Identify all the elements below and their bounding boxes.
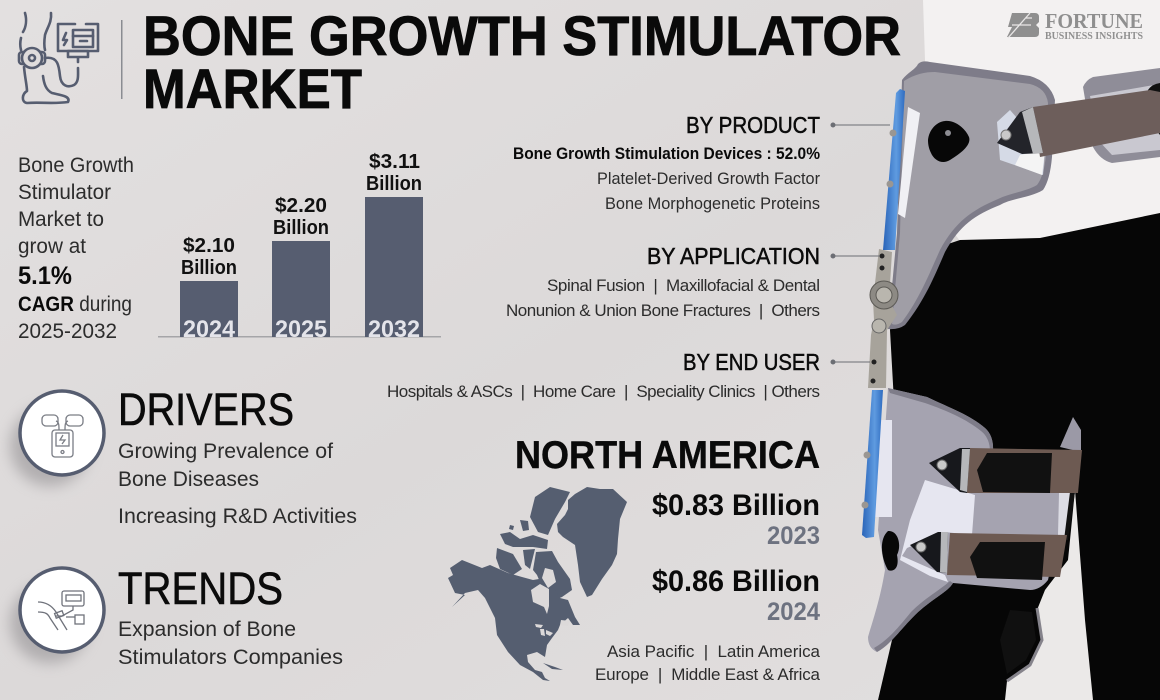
other regions: Asia Pacific | Latin America <box>607 642 821 661</box>
regional values: 2024 <box>767 598 820 626</box>
lower black spot <box>882 531 899 571</box>
white shirt <box>923 0 1160 241</box>
by product block: Platelet-Derived Growth Factor <box>597 169 820 188</box>
drivers text block: Increasing R&D Activities <box>118 504 357 528</box>
light gap between legs <box>1000 450 1100 700</box>
lower brace pad <box>868 388 1060 652</box>
by end user block: BY END USER <box>683 349 820 375</box>
strap 1 <box>967 448 1082 493</box>
by end user block <box>387 349 820 401</box>
regional values <box>652 489 820 626</box>
title: MARKET <box>143 57 362 120</box>
bar 2025 <box>272 194 330 343</box>
connectors to brace <box>831 123 890 364</box>
top strap <box>1033 90 1160 157</box>
drivers text block: DRIVERS <box>118 384 294 435</box>
logo: Fortune Business Insights: FORTUNE <box>1045 9 1143 33</box>
rear pad <box>1083 68 1160 163</box>
strap buckle <box>997 107 1043 154</box>
regional values: $0.86 Billion <box>652 565 820 598</box>
upper brace pad <box>888 61 1055 329</box>
bar 2024 <box>180 234 238 343</box>
bar chart: market size <box>158 150 441 343</box>
CAGR text block: grow at <box>18 235 86 258</box>
logo: Fortune Business Insights: BUSINESS INSIGHTS <box>1045 31 1143 42</box>
bar 2025: Billion <box>273 216 329 239</box>
white insert lower <box>875 420 892 517</box>
regional values: $0.83 Billion <box>652 489 820 522</box>
other regions <box>595 642 821 684</box>
black spot <box>928 121 969 162</box>
by end user block: Hospitals & ASCs | Home Care | Speciality Clinics | Others <box>387 382 820 401</box>
drivers text block: Growing Prevalence of <box>118 439 333 463</box>
bar 2032: Billion <box>366 172 422 195</box>
by product block: Bone Morphogenetic Proteins <box>605 194 820 213</box>
light plate under strap <box>997 110 1045 175</box>
icon: trends circle <box>10 568 104 663</box>
CAGR text block <box>18 154 134 343</box>
by product block: BY PRODUCT <box>686 112 820 138</box>
inner thigh edge <box>1007 608 1042 681</box>
trends text block: Expansion of Bone <box>118 617 296 641</box>
bar 2024: Billion <box>181 256 237 279</box>
regional values: 2023 <box>767 522 820 550</box>
CAGR text block: Stimulator <box>18 181 111 204</box>
far edge of lower brace <box>1060 417 1081 452</box>
CAGR text block: 2025-2032 <box>18 320 117 343</box>
north america heading: NORTH AMERICA <box>515 434 820 477</box>
by product block: Bone Growth Stimulation Devices : 52.0% <box>513 145 820 163</box>
bar 2025: $2.20 <box>275 194 327 217</box>
CAGR text block: Bone Growth <box>18 154 134 177</box>
by application block: BY APPLICATION <box>647 243 820 269</box>
other regions: Europe | Middle East & Africa <box>595 665 821 684</box>
by application block <box>506 243 820 320</box>
drivers text block <box>118 384 357 528</box>
bar 2032 <box>365 150 423 343</box>
black trousers <box>878 213 1160 700</box>
by application block: Nonunion & Union Bone Fractures | Others <box>506 301 820 320</box>
icon: drivers circle <box>10 391 104 486</box>
trends text block: TRENDS <box>118 563 283 614</box>
drivers text block: Bone Diseases <box>118 467 259 491</box>
logo: Fortune Business Insights <box>1007 9 1143 42</box>
metal hinge <box>868 249 897 388</box>
bar 2024: 2024 <box>183 316 236 343</box>
CAGR text block: 5.1% <box>18 262 72 290</box>
blue bar lower <box>862 390 883 538</box>
white insert <box>898 107 920 218</box>
by application block: Spinal Fusion | Maxillofacial & Dental <box>547 276 820 295</box>
CAGR text block: Market to <box>18 208 104 231</box>
photo: person wearing hip brace <box>862 0 1160 700</box>
bar 2032: 2032 <box>368 316 420 343</box>
title: BONE GROWTH STIMULATOR <box>143 4 901 67</box>
header divider <box>121 20 122 99</box>
trends text block <box>118 563 343 669</box>
bar 2025: 2025 <box>275 316 327 343</box>
bar 2024: $2.10 <box>183 234 235 257</box>
blue bar upper <box>883 89 905 250</box>
strap 2 <box>947 533 1067 577</box>
trends text block: Stimulators Companies <box>118 645 343 669</box>
map: North America <box>448 487 627 681</box>
CAGR text block: CAGR during <box>18 293 132 316</box>
bar 2032: $3.11 <box>369 150 420 173</box>
title <box>143 4 901 120</box>
icon: leg with stimulator device <box>19 13 98 103</box>
by product block <box>513 112 820 213</box>
white plate <box>900 480 975 582</box>
